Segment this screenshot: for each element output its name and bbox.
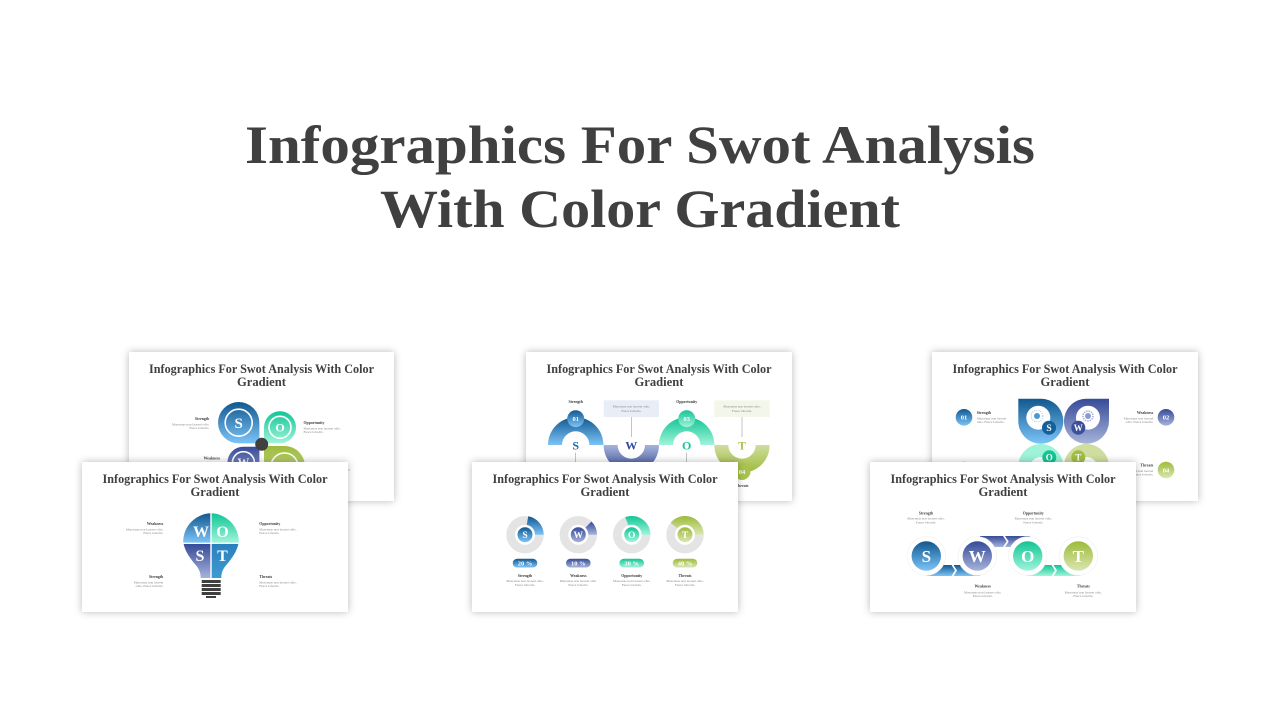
slide: teardrops SWOT (back right): Strength [977, 411, 992, 415]
slide: petal SWOT (back left): Gradient [237, 375, 287, 389]
slide: light bulb SWOT (front left): Gradient [191, 485, 240, 499]
slide: chevron flow SWOT (front right): Maecenas non laoreet odio. [964, 590, 1001, 594]
slide: light bulb SWOT (front left): Fusce lobortis. [259, 531, 279, 535]
title: With Color Gradient [380, 179, 900, 239]
slide: light bulb SWOT (front left): Maecenas non laoreet odio. [126, 528, 163, 532]
slide: chevron flow SWOT (front right): O [1021, 547, 1034, 566]
slide: arches SWOT (back middle): Opportunity [676, 400, 697, 404]
slide: teardrops SWOT (back right): Maecenas non laoreet [1124, 469, 1153, 473]
slide: arches SWOT (back middle): T [738, 438, 746, 452]
slide: chevron flow SWOT (front right): Fusce lobortis. [973, 594, 993, 598]
slide: donut percentages SWOT (front middle): 30 % [624, 560, 639, 567]
slide: donut percentages SWOT (front middle): T [682, 531, 689, 541]
slide: petal SWOT (back left): Maecenas non laoreet odio. [172, 422, 209, 426]
slide: teardrops SWOT (back right): S [1046, 424, 1052, 434]
slide: chevron flow SWOT (front right): Weakness [974, 584, 991, 588]
slide: donut percentages SWOT (front middle): Maecenas non laoreet odio. [506, 579, 544, 583]
slide: donut percentages SWOT (front middle): S [522, 531, 528, 541]
slide: chevron flow SWOT (front right): Fusce lobortis. [1023, 521, 1043, 525]
slide: teardrops SWOT (back right): T [1075, 453, 1081, 463]
slide: arches SWOT (back middle): Threats [736, 484, 749, 488]
slide: donut percentages SWOT (front middle): Infographics For Swot Analysis With Color [492, 472, 718, 486]
slide: petal SWOT (back left): Infographics For Swot Analysis With Color [149, 362, 374, 376]
slide: donut percentages SWOT (front middle): Threats [679, 574, 692, 578]
slide: donut percentages SWOT (front middle): Gradient [581, 485, 630, 499]
slide: petal SWOT (back left): Fusce lobortis. [189, 426, 209, 430]
slide: chevron flow SWOT (front right): W [969, 547, 986, 566]
slide: teardrops SWOT (back right): Threats [1140, 464, 1154, 468]
slide: chevron flow SWOT (front right): Gradient [979, 485, 1028, 499]
slide: light bulb SWOT (front left): S [196, 548, 205, 565]
slide: donut percentages SWOT (front middle): Weakness [570, 574, 587, 578]
slide: chevron flow SWOT (front right): Threats [1077, 584, 1090, 588]
slide: teardrops SWOT (back right): 02 [1163, 415, 1169, 422]
slide: teardrops SWOT (back right): odio. Fusce lobortis. [1126, 472, 1153, 476]
slide: donut percentages SWOT (front middle): Fusce lobortis. [515, 583, 535, 587]
slide: donut percentages SWOT (front middle): 40 % [678, 560, 692, 567]
slide: donut percentages SWOT (front middle): Fusce lobortis. [622, 583, 642, 587]
slide: chevron flow SWOT (front right) [870, 462, 1136, 612]
slide: light bulb SWOT (front left): T [217, 548, 228, 565]
slide: light bulb SWOT (front left): Fusce lobortis. [259, 584, 279, 588]
slide: light bulb SWOT (front left): Infographics For Swot Analysis With Color [102, 472, 328, 486]
slide: donut percentages SWOT (front middle): W [574, 531, 584, 541]
slide: light bulb SWOT (front left): W [193, 524, 209, 541]
slide: arches SWOT (back middle): Strength [568, 400, 584, 404]
slide: chevron flow SWOT (front right): Strength [919, 512, 934, 516]
slide: arches SWOT (back middle): O [682, 438, 691, 452]
slide: teardrops SWOT (back right): odio. Fusce lobortis. [977, 420, 1005, 424]
slide: petal SWOT (back left): W [237, 455, 249, 469]
slide: teardrops SWOT (back right): odio. Fusce lobortis. [1126, 420, 1153, 424]
slide: arches SWOT (back middle): Infographics For Swot Analysis With Color [546, 362, 772, 376]
slide: teardrops SWOT (back right): Infographics For Swot Analysis With Color [952, 362, 1178, 376]
slide: arches SWOT (back middle): 03 [683, 416, 691, 423]
slide: arches SWOT (back middle) [526, 352, 792, 501]
icon: bulb [1031, 410, 1043, 422]
slide: teardrops SWOT (back right): 01 [961, 415, 967, 422]
slide: chevron flow SWOT (front right): S [922, 547, 931, 566]
slide: arches SWOT (back middle): W [625, 438, 637, 452]
title: Infographics For Swot Analysis [245, 115, 1035, 175]
slide: teardrops SWOT (back right): W [1074, 423, 1083, 433]
slide: arches SWOT (back middle): Gradient [635, 375, 684, 389]
slide: donut percentages SWOT (front middle): 10 % [571, 560, 586, 567]
slide: petal SWOT (back left): Weakness [204, 456, 220, 460]
slide: donut percentages SWOT (front middle): Maecenas non laoreet odio. [560, 579, 597, 583]
slide: arches SWOT (back middle): Fusce lobortis. [621, 409, 641, 413]
slide: chevron flow SWOT (front right): Fusce lobortis. [1073, 594, 1093, 598]
slide: donut percentages SWOT (front middle): Maecenas non laoreet odio. [666, 579, 704, 583]
slide: teardrops SWOT (back right): Weakness [1137, 411, 1154, 415]
slide: petal SWOT (back left): Maecenas non laoreet odio. [304, 426, 341, 430]
slide: light bulb SWOT (front left): O [216, 524, 229, 541]
slide: teardrops SWOT (back right): O [1046, 453, 1053, 463]
slide: teardrops SWOT (back right): 04 [1163, 467, 1170, 474]
slide: light bulb SWOT (front left): Threats [259, 575, 273, 579]
slide: arches SWOT (back middle): 04 [739, 469, 746, 476]
icon: gear [1083, 411, 1093, 421]
slide: petal SWOT (back left): Threats [313, 462, 326, 466]
slide: petal SWOT (back left): Fusce lobortis. [304, 430, 324, 434]
slide: chevron flow SWOT (front right): Infographics For Swot Analysis With Color [890, 472, 1116, 486]
slide: chevron flow SWOT (front right): T [1073, 547, 1085, 566]
slide: petal SWOT (back left): Maecenas non laoreet odio. [313, 467, 350, 471]
slide: light bulb SWOT (front left): Fusce lobortis. [143, 531, 163, 535]
slide: petal SWOT (back left) [129, 352, 394, 501]
slide: light bulb SWOT (front left): Opportunity [259, 522, 280, 526]
slide: light bulb SWOT (front left) [82, 462, 348, 612]
slide: teardrops SWOT (back right) [932, 352, 1198, 501]
slide: petal SWOT (back left): S [235, 416, 243, 432]
slide: light bulb SWOT (front left): Maecenas non laoreet [134, 580, 163, 584]
slide: chevron flow SWOT (front right): Opportunity [1023, 512, 1044, 516]
slide: chevron flow SWOT (front right): Fusce lobortis. [916, 521, 936, 525]
slide: donut percentages SWOT (front middle): Opportunity [621, 574, 642, 578]
slide: light bulb SWOT (front left): Maecenas non laoreet odio. [259, 528, 297, 532]
slide: petal SWOT (back left): O [275, 420, 285, 434]
slide: arches SWOT (back middle): 01 [572, 416, 579, 423]
slide: light bulb SWOT (front left): Weakness [147, 522, 164, 526]
slide: donut percentages SWOT (front middle): Fusce lobortis. [675, 583, 695, 587]
slide: donut percentages SWOT (front middle): Fusce lobortis. [568, 583, 588, 587]
slide: teardrops SWOT (back right): Maecenas non laoreet [977, 416, 1006, 420]
slide: teardrops SWOT (back right): Gradient [1041, 375, 1090, 389]
slide: teardrops SWOT (back right): Maecenas non laoreet [1124, 416, 1153, 420]
slide: light bulb SWOT (front left): odio. Fusce lobortis. [136, 584, 163, 588]
slide: chevron flow SWOT (front right): Maecenas non laoreet odio. [1065, 590, 1102, 594]
slide: arches SWOT (back middle): S [572, 438, 579, 452]
slide: petal SWOT (back left): Strength [195, 417, 210, 421]
slide: donut percentages SWOT (front middle): Maecenas non laoreet odio. [613, 579, 650, 583]
slide: chevron flow SWOT (front right): Maecenas non laoreet odio. [907, 517, 945, 521]
slide: arches SWOT (back middle): Fusce lobortis. [732, 409, 752, 413]
slide: arches SWOT (back middle): Maecenas non laoreet odio. [723, 404, 761, 408]
slide: chevron flow SWOT (front right): Maecenas non laoreet odio. [1015, 517, 1052, 521]
slide: petal SWOT (back left): Opportunity [304, 421, 325, 425]
title [245, 115, 1035, 239]
slide: light bulb SWOT (front left): Maecenas non laoreet odio. [259, 580, 297, 584]
slide: donut percentages SWOT (front middle): O [628, 531, 635, 541]
slide: donut percentages SWOT (front middle): 20 % [518, 560, 532, 567]
slide: donut percentages SWOT (front middle): Strength [518, 574, 533, 578]
slide: donut percentages SWOT (front middle) [472, 462, 738, 612]
slide: arches SWOT (back middle): Maecenas non laoreet odio. [613, 404, 650, 408]
slide: light bulb SWOT (front left): Strength [149, 575, 164, 579]
